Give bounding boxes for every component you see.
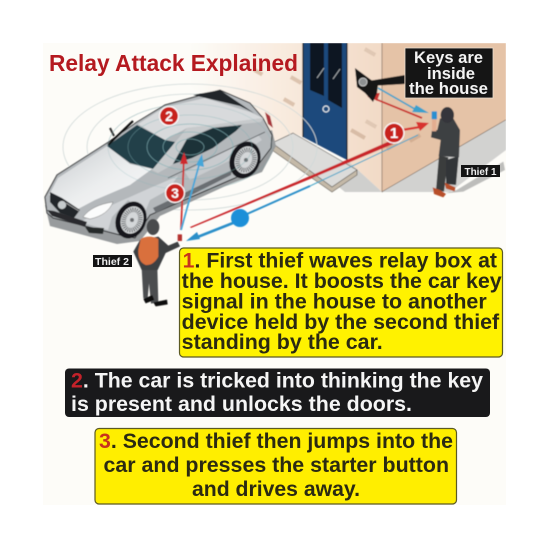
signal ripples on the ground — [63, 84, 317, 210]
blue relay dot — [231, 209, 249, 227]
number badge 2 — [160, 106, 178, 126]
panel: step 3: and drives away. — [192, 478, 360, 501]
ripples over the car — [108, 104, 272, 190]
arrows up to the car door — [180, 152, 204, 230]
door sill — [153, 170, 232, 213]
number badge 1: 1 — [390, 125, 398, 142]
title: Relay Attack Explained — [49, 50, 298, 76]
label: thief 1: Thief 1 — [464, 167, 497, 178]
thief 1 shadow — [445, 162, 505, 193]
rear window stripe — [193, 90, 254, 113]
arrows at the house — [368, 88, 429, 118]
hood — [49, 146, 152, 209]
front grille — [50, 192, 80, 218]
thief 2 torso and arm — [133, 237, 180, 270]
thief 1 torso — [431, 118, 460, 157]
thief 2 backpack — [138, 237, 158, 265]
panel: step 3 — [95, 428, 456, 504]
roof — [138, 98, 263, 140]
callout: keys are inside the house — [405, 48, 493, 98]
car — [45, 90, 276, 244]
doorstep — [272, 133, 357, 192]
label: thief 2: Thief 2 — [95, 257, 129, 268]
callout: keys are inside the house: the house — [409, 80, 488, 98]
tail light — [265, 112, 273, 128]
thief 2 hood — [147, 219, 159, 235]
headlight — [83, 202, 113, 219]
panel: step 1: the house. It boosts the car key — [182, 270, 502, 293]
thief 2 legs — [142, 268, 158, 304]
background panel — [43, 43, 506, 505]
panel: step 1: device held by the second thief — [182, 311, 500, 334]
panel: step 1: 1. First thief waves relay box at — [183, 250, 497, 272]
label: thief 2 — [93, 255, 132, 268]
house front wall — [190, 43, 382, 192]
thief 1 hand and phone — [432, 111, 437, 119]
house side wall — [382, 43, 506, 192]
pavement by the house — [320, 120, 506, 192]
panel: step 1 — [180, 248, 502, 357]
bottom lip — [47, 210, 87, 227]
panel: step 1: signal in the house to another — [182, 290, 487, 313]
front door — [303, 43, 347, 160]
panel: step 3: 3. Second thief then jumps into the — [99, 430, 453, 453]
windscreen — [107, 125, 175, 169]
panel: step 1: standing by the car. — [182, 331, 383, 354]
panel: step 2: is present and unlocks the doors. — [71, 392, 412, 416]
blue signal arrow — [186, 135, 418, 241]
panel: step 2: 2. The car is tricked into thinking the key — [71, 368, 483, 392]
thief 2 — [133, 219, 182, 306]
car shadow — [45, 130, 276, 244]
car body — [45, 90, 272, 238]
thief 1 — [431, 107, 505, 197]
bumper vent — [85, 227, 104, 234]
rear wheel — [228, 140, 262, 179]
number badge 2: 2 — [165, 108, 173, 124]
front fender and door highlight — [80, 176, 178, 230]
red signal arrow — [190, 122, 429, 228]
side windows — [173, 125, 242, 164]
pillar band — [152, 118, 263, 173]
number badge 3: 3 — [171, 185, 179, 201]
panel: step 3: car and presses the starter button — [104, 454, 449, 477]
thief 1 legs — [436, 155, 448, 192]
front wheel — [114, 201, 148, 239]
thief 2 shoes — [143, 295, 154, 303]
callout: keys are inside the house: Keys are — [414, 49, 483, 67]
icon: car key device — [355, 68, 405, 102]
label: thief 1 — [461, 165, 500, 178]
number badge 1 — [384, 123, 404, 143]
wiper mirror line — [108, 121, 133, 145]
thief 1 shoes — [433, 187, 446, 197]
callout: keys are inside the house: inside — [427, 65, 475, 83]
thief 1 hood — [441, 107, 454, 123]
thief 2 relay box — [178, 234, 182, 241]
panel: step 2 — [65, 368, 490, 417]
number badge 3 — [166, 184, 184, 202]
illustration scene — [45, 43, 506, 306]
